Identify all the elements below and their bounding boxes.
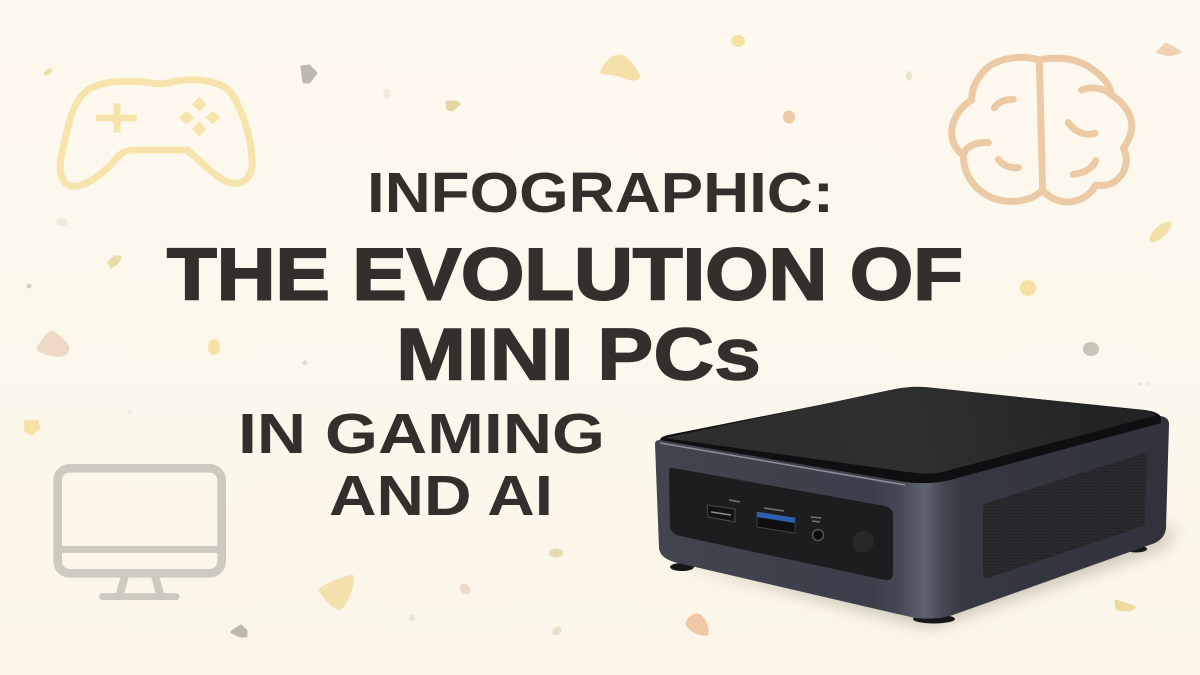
icon: game controller [60,80,252,186]
heading: in gaming: IN GAMING [238,402,605,466]
title block [167,161,963,528]
icon: brain [952,57,1132,202]
lid rim [660,387,1161,483]
front port panel [669,468,893,580]
chassis top edge highlight [660,443,905,485]
heading: infographic: INFOGRAPHIC: [367,161,834,225]
rubber feet [670,546,1147,624]
device shadow [665,525,1178,628]
mini PC device [655,387,1178,628]
heading: the evolution of: THE EVOLUTION OF [167,234,963,316]
chassis body [655,416,1169,619]
side vent grille [983,454,1147,578]
usb-a blue port [757,508,795,533]
lid top surface [664,387,1155,474]
usb-c port [707,500,740,522]
power button [852,531,874,553]
heading: mini pcs: MINI PCs [396,314,761,396]
heading: and ai: AND AI [329,464,553,528]
audio jack [811,517,824,540]
icon: desktop monitor [58,468,222,597]
